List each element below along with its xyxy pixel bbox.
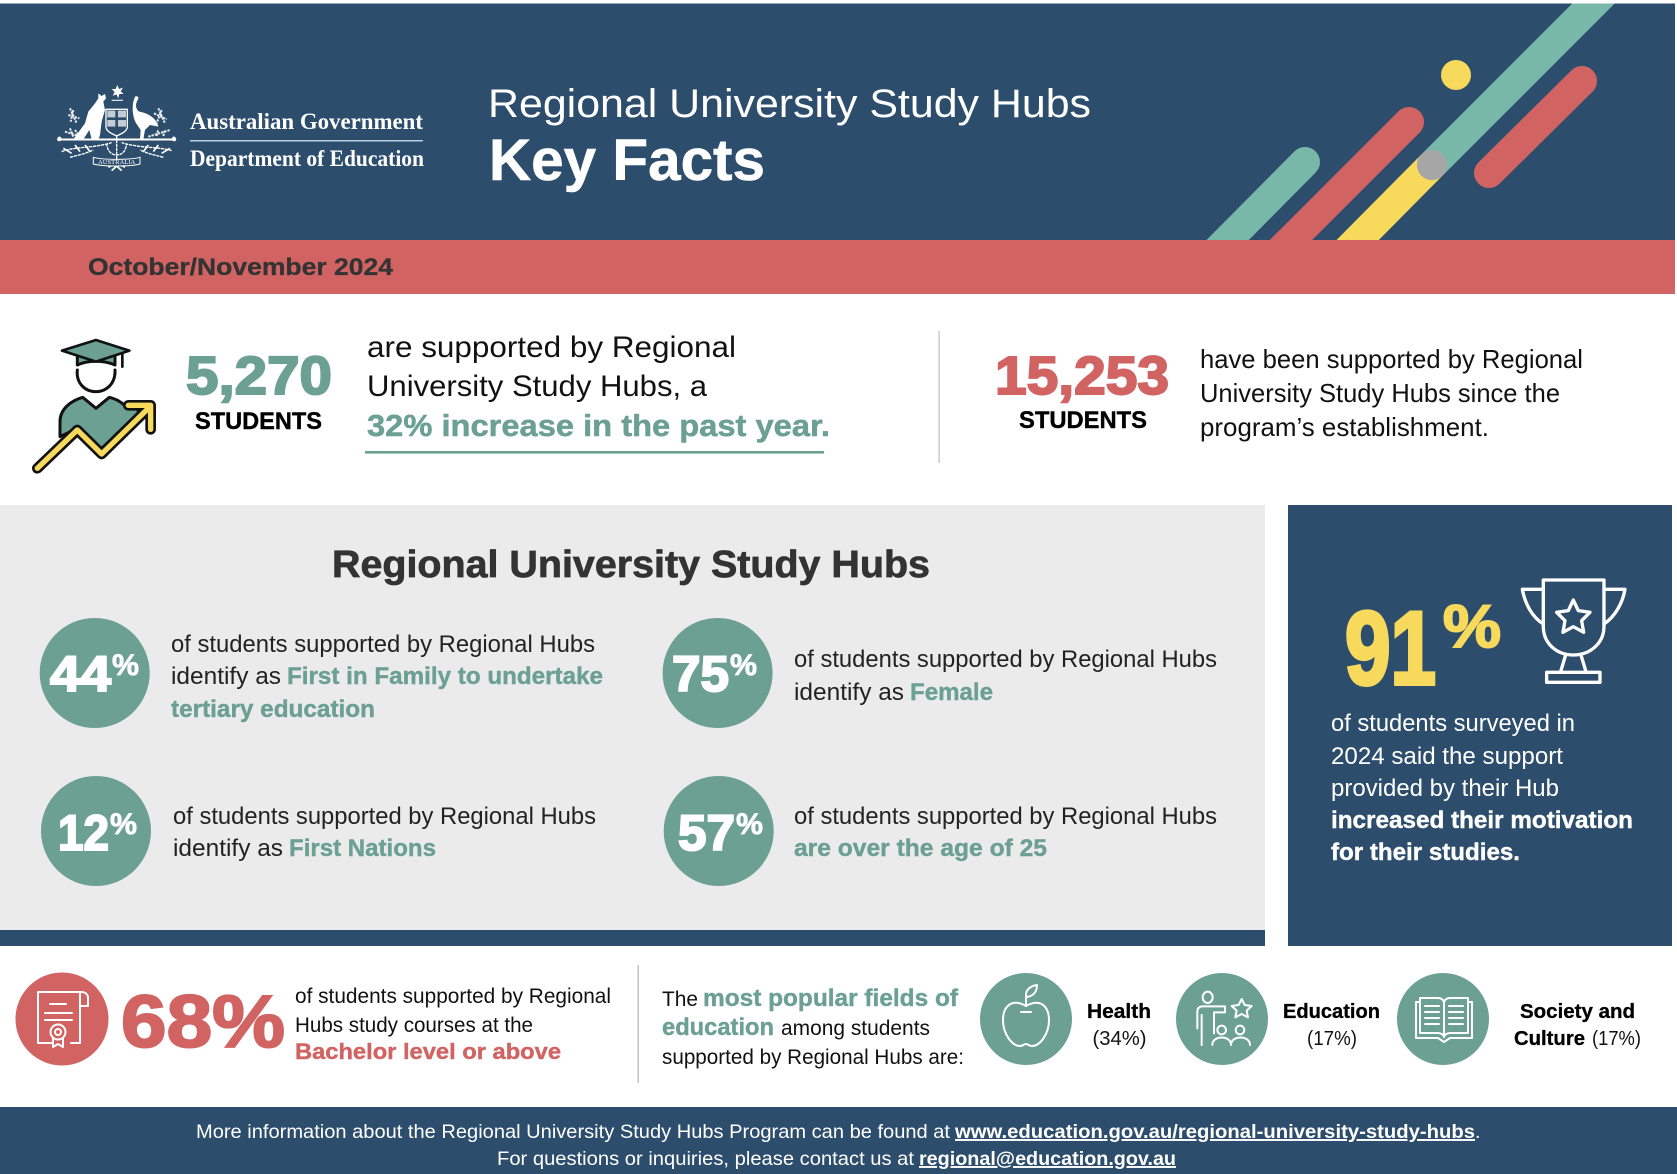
title: Regional University Study Hubs [488, 82, 1091, 126]
field: education [1176, 973, 1380, 1065]
stat: 15,253 students: 15,253 [995, 346, 1169, 406]
stat: 75 percent female [663, 618, 1217, 728]
stat: 57 percent over 25: % [736, 808, 763, 841]
panel: regional hubs statistics [0, 505, 1265, 946]
panel: 91 percent motivation [1288, 505, 1672, 946]
stat: 68 percent bachelor level [121, 980, 611, 1064]
footer: contact information: regional@education.gov.au [919, 1148, 1176, 1170]
text: most popular fields: The [662, 987, 698, 1011]
text: increase statement: University Study Hubs, a [367, 370, 707, 403]
date band [0, 240, 1675, 294]
stat: 44 percent first in family: First in Family to undertake [287, 663, 603, 690]
text: department name: Department of Education [190, 146, 424, 171]
text: motivation statement: of students surveyed in [1331, 710, 1575, 737]
stat: 75 percent female: 75 [672, 646, 729, 702]
footer: contact information: More information about the Regional University Study Hubs Program can be found at [196, 1121, 951, 1143]
footer: contact information: For questions or inquiries, please contact us at [497, 1148, 915, 1170]
panel: header banner [0, 0, 1677, 278]
field: society and culture [1397, 973, 1641, 1065]
stat: 44 percent first in family: of students supported by Regional Hubs [171, 631, 595, 658]
field: health [980, 973, 1151, 1065]
text: since establishment: have been supported by Regional [1200, 344, 1583, 374]
stat: 57 percent over 25: are over the age of 25 [794, 835, 1047, 862]
stat: 57 percent over 25: of students supported by Regional Hubs [794, 803, 1217, 830]
stat: 44 percent first in family: 44 [50, 646, 111, 702]
field: society and culture: (17%) [1592, 1027, 1641, 1050]
text: most popular fields: most popular fields of [703, 985, 959, 1012]
field: education: Education [1283, 1000, 1380, 1023]
text: department name [190, 109, 424, 171]
stat: 68 percent bachelor level: of students supported by Regional [295, 984, 611, 1008]
decorative stripes [1190, 0, 1610, 278]
field: health: Health [1087, 1000, 1151, 1023]
text: since establishment [1200, 344, 1583, 442]
logo: Australian Government crest: AUSTRALIA [98, 159, 136, 166]
text: motivation statement: for their studies. [1331, 839, 1520, 866]
icon: teacher [1197, 992, 1252, 1045]
stat: 91 percent: % [1443, 593, 1501, 660]
text: most popular fields [662, 985, 964, 1069]
footer: contact information: . [1475, 1121, 1480, 1143]
stat: 12 percent first nations: % [110, 808, 137, 841]
icon: diploma scroll [16, 972, 108, 1066]
footer: contact information [0, 1107, 1677, 1174]
stat: 57 percent over 25: 57 [678, 805, 735, 861]
icon: apple [1003, 985, 1049, 1046]
icon: trophy [1522, 580, 1625, 682]
stat: 12 percent first nations: First Nations [289, 835, 436, 862]
footer: contact information: www.education.gov.au/regional-university-study-hubs [954, 1121, 1475, 1143]
stat: 75 percent female: of students supported by Regional Hubs [794, 646, 1217, 673]
stat: 44 percent first in family: % [112, 649, 139, 682]
stat: 68 percent bachelor level: 68% [121, 980, 285, 1063]
text: since establishment: University Study Hubs since the [1200, 378, 1560, 408]
text: increase statement: 32% increase in the past year. [367, 408, 830, 443]
stat: 12 percent first nations: 12 [58, 805, 109, 861]
text: increase statement: are supported by Regional [367, 331, 736, 364]
stat: 5,270 students [186, 346, 332, 435]
stat: 68 percent bachelor level: Bachelor level or above [295, 1039, 561, 1064]
title [488, 82, 1091, 193]
title: Key Facts [489, 128, 765, 193]
text: motivation statement: 2024 said the support [1331, 743, 1563, 770]
text: most popular fields: among students [781, 1016, 930, 1040]
text: increase statement [365, 331, 830, 454]
field: society and culture: Society and [1520, 1000, 1635, 1023]
icon: graduate with rising arrow [37, 340, 151, 468]
stat: 57 percent over 25 [664, 776, 1217, 886]
stat: 12 percent first nations: of students supported by Regional Hubs [173, 803, 596, 830]
stat: 5,270 students: 5,270 [186, 346, 332, 406]
logo: Australian Government crest [57, 85, 176, 171]
stat: 44 percent first in family: identify as [171, 663, 281, 690]
text: most popular fields: supported by Regional Hubs are: [662, 1045, 964, 1069]
stat: 12 percent first nations [41, 776, 596, 886]
stat: 91 percent: 91 [1345, 591, 1436, 707]
date band: October/November 2024 [88, 254, 394, 281]
field: society and culture: Culture [1514, 1027, 1585, 1050]
heading: Regional University Study Hubs [332, 544, 930, 586]
icon: open book [1416, 998, 1472, 1042]
text: motivation statement [1331, 710, 1633, 866]
text: since establishment: program’s establishment. [1200, 412, 1489, 442]
stat: 5,270 students: STUDENTS [195, 408, 322, 435]
text: most popular fields: education [662, 1014, 774, 1041]
stat: 15,253 students: STUDENTS [1019, 407, 1147, 434]
stat: 15,253 students [995, 346, 1169, 434]
stat: 75 percent female: Female [910, 679, 993, 706]
stat: 68 percent bachelor level: Hubs study courses at the [295, 1013, 533, 1037]
field: education: (17%) [1307, 1027, 1357, 1050]
field: health: (34%) [1092, 1027, 1146, 1050]
text: motivation statement: increased their motivation [1331, 807, 1633, 834]
stat: 75 percent female: identify as [794, 679, 904, 706]
text: motivation statement: provided by their Hub [1331, 775, 1559, 802]
stat: 75 percent female: % [730, 649, 757, 682]
text: department name: Australian Government [190, 109, 423, 134]
stat: 44 percent first in family: tertiary education [171, 696, 375, 723]
stat: 12 percent first nations: identify as [173, 835, 283, 862]
stat: 44 percent first in family [40, 618, 603, 728]
